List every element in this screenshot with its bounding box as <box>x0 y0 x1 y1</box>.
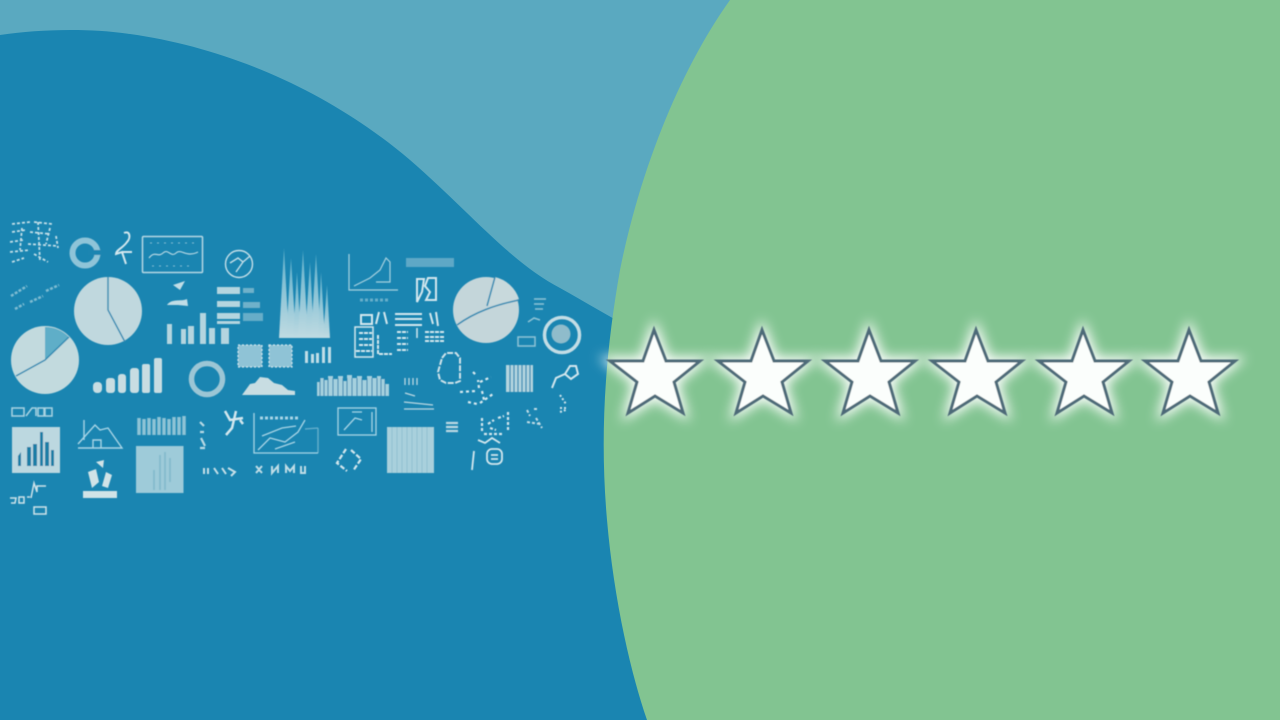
icon: clock dial <box>226 250 252 278</box>
chart: small bars <box>167 313 229 344</box>
icon: header glyphs <box>12 408 52 416</box>
icon: mini legend <box>404 378 434 409</box>
chart: pie top <box>74 277 142 345</box>
icon: star 5 <box>1039 330 1129 413</box>
chart: horizontal list bars <box>217 287 263 324</box>
icon: stacked lines <box>446 423 458 431</box>
star rating row <box>610 330 1235 413</box>
icon: vertical dashes <box>200 422 205 448</box>
chart: pie right <box>453 277 519 343</box>
chart: striped bars right <box>506 365 533 392</box>
chart: mini bars <box>305 347 331 363</box>
icon: small scribble right <box>527 409 542 428</box>
chart: spike chart <box>279 248 330 338</box>
icon: glyph row under chart <box>256 466 305 473</box>
icon: small glyph row <box>204 468 235 476</box>
chart: line chart top <box>349 254 398 300</box>
icon: star 4 <box>932 330 1022 413</box>
icon: framed trend <box>338 408 376 435</box>
icon: person cluster <box>83 460 117 498</box>
icon: small ring gauge <box>72 240 102 266</box>
icon: blurred label <box>406 258 454 267</box>
icon: linked nodes <box>552 366 578 412</box>
chart: dotted grids <box>238 345 292 367</box>
chart: striped square right <box>387 427 434 473</box>
icon: star 3 <box>825 330 915 413</box>
icon: star 2 <box>718 330 808 413</box>
icon: small notes right <box>518 299 546 346</box>
chart: shaded square <box>136 446 184 493</box>
icon: scribbled notes left <box>11 285 59 309</box>
icon: cloud area <box>242 377 295 395</box>
icon: framed line panel <box>142 236 202 272</box>
icon: small arrow mark <box>167 281 188 306</box>
chart: bar band small <box>139 416 184 435</box>
icon: target ring <box>544 318 580 352</box>
chart: bar band <box>317 375 389 396</box>
icon: text and dashboard cluster <box>355 312 445 357</box>
icon: bracket shape <box>438 353 460 383</box>
icon: mountain chart <box>78 420 122 448</box>
icon: donut ring <box>192 364 222 394</box>
chart: boxed line chart <box>254 413 318 453</box>
icon: hook symbol <box>116 232 132 264</box>
icon: frame glyph <box>417 278 436 302</box>
icon: scribbled map <box>10 222 58 262</box>
icon: scattered dots <box>460 372 493 404</box>
icon: scatter block <box>482 412 508 434</box>
icon: scribble bottom left <box>10 483 46 514</box>
chart: pie with wedge <box>11 326 79 394</box>
icon: dashed diamond <box>337 449 361 471</box>
chart: boxed bars <box>12 427 60 473</box>
chart: growth bars <box>93 358 162 393</box>
wave: dark blue <box>0 30 660 720</box>
data icon cluster <box>10 222 580 514</box>
icon: lock glyph <box>472 438 502 470</box>
icon: star 1 <box>610 330 700 413</box>
icon: plant glyph <box>225 411 243 435</box>
panel: green circle <box>604 0 1280 720</box>
icon: star 6 <box>1145 330 1235 413</box>
